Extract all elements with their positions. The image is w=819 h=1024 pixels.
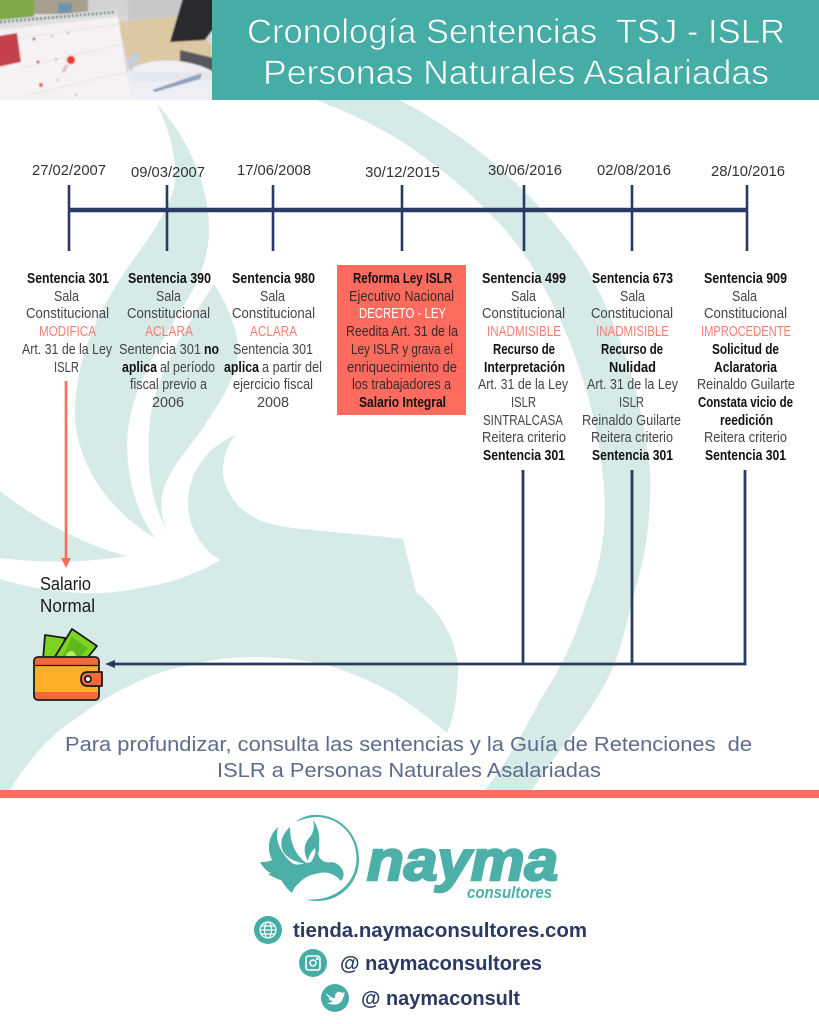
- arrow: later rulings back to wallet: [105, 470, 746, 668]
- column: Sentencia 980: a partir del: [262, 360, 322, 376]
- column: Sentencia 301: MODIFICA: [39, 324, 96, 340]
- column: Sentencia 673: INADMISIBLE: [596, 324, 669, 340]
- column: Sentencia 980: [224, 271, 322, 411]
- timeline axis: [69, 185, 747, 251]
- column: Sentencia 909: Constata vicio de: [698, 395, 793, 411]
- icon: globe: [254, 916, 282, 944]
- text: call to action: Para profundizar, consulta las sentencias y la Guía de Retenciones de: [65, 734, 752, 756]
- column: Sentencia 499: Sentencia 499: [482, 271, 566, 287]
- column: Sentencia 499: Constitucional: [482, 306, 565, 322]
- title: Personas Naturales Asalariadas: [263, 54, 769, 92]
- panel: Reforma Ley ISLR: DECRETO - LEY: [359, 306, 446, 322]
- column: Sentencia 390: Constitucional: [127, 306, 210, 322]
- timeline dates: 30/12/2015: [365, 165, 440, 181]
- text: call to action: [65, 734, 752, 782]
- column: Sentencia 673: [582, 271, 681, 464]
- timeline dates: [32, 163, 785, 181]
- column: Sentencia 301: Sentencia 301: [27, 271, 109, 287]
- column: Sentencia 390: no: [204, 342, 219, 358]
- timeline dates: 02/08/2016: [597, 163, 671, 179]
- column: Sentencia 980: Sentencia 980: [232, 271, 315, 287]
- label: Salario Normal: [40, 574, 95, 616]
- column: Sentencia 909: IMPROCEDENTE: [701, 324, 791, 340]
- label: Salario Normal: Normal: [40, 596, 95, 616]
- column: Sentencia 673: Sala: [620, 289, 646, 305]
- column: Sentencia 499: Interpretación: [484, 360, 565, 376]
- label: Salario Normal: Salario: [40, 574, 91, 594]
- background watermark: phoenix logo: [0, 100, 650, 790]
- column: Sentencia 980: ejercicio fiscal: [233, 377, 313, 393]
- column: Sentencia 390: [119, 271, 219, 411]
- panel: Reforma Ley ISLR: enriquecimiento de: [347, 360, 457, 376]
- icon: instagram: [299, 949, 327, 977]
- column: Sentencia 499: Sentencia 301: [483, 448, 565, 464]
- column: Sentencia 301: Sala: [54, 289, 80, 305]
- panel: Reforma Ley ISLR: Reedita Art. 31 de la: [346, 324, 459, 340]
- column: Sentencia 980: aplica: [224, 360, 260, 376]
- column: Sentencia 980: 2008: [257, 395, 289, 411]
- column: Sentencia 909: reedición: [720, 413, 773, 429]
- contact: website: tienda.naymaconsultores.com: [293, 919, 587, 942]
- contact: instagram: [299, 949, 542, 977]
- tagline: consultores: [467, 883, 552, 902]
- column: Sentencia 390: 2006: [152, 395, 184, 411]
- column: Sentencia 499: SINTRALCASA: [483, 413, 563, 429]
- panel: Reforma Ley ISLR: Ejecutivo Nacional: [349, 289, 454, 305]
- column: Sentencia 390: aplica: [122, 360, 158, 376]
- text: call to action: ISLR a Personas Naturales Asalariadas: [217, 760, 601, 782]
- wordmark: nayma: [367, 829, 558, 893]
- column: Sentencia 499: INADMISIBLE: [487, 324, 561, 340]
- contact: instagram: @ naymaconsultores: [340, 952, 542, 975]
- panel: Reforma Ley ISLR: Salario Integral: [359, 395, 446, 411]
- icon: wallet with banknotes: [34, 629, 102, 700]
- column: Sentencia 301: [22, 271, 113, 376]
- column: Sentencia 673: Nulidad: [609, 360, 656, 376]
- icon: twitter: [321, 984, 349, 1012]
- column: Sentencia 673: Sentencia 301: [592, 448, 673, 464]
- column: Sentencia 909: Sala: [732, 289, 758, 305]
- column: Sentencia 673: Constitucional: [591, 306, 673, 322]
- column: Sentencia 909: Constitucional: [704, 306, 787, 322]
- timeline dates: 09/03/2007: [131, 165, 205, 181]
- timeline dates: 30/06/2016: [488, 163, 562, 179]
- arrow: Sentencia 301 to Salario Normal: [61, 381, 71, 568]
- panel: Reforma Ley ISLR: Ley ISLR y grava el: [351, 342, 453, 358]
- column: Sentencia 909: Aclaratoria: [714, 360, 778, 376]
- title: Cronología Sentencias TSJ - ISLR: [247, 13, 785, 51]
- column: Sentencia 909: Reitera criterio: [704, 430, 787, 446]
- column: Sentencia 980: Sala: [260, 289, 286, 305]
- column: Sentencia 673: ISLR: [619, 395, 644, 411]
- column: Sentencia 390: ACLARA: [145, 324, 193, 340]
- column: Sentencia 909: Sentencia 909: [704, 271, 787, 287]
- column: Sentencia 499: Recurso de: [493, 342, 555, 358]
- column: Sentencia 499: ISLR: [511, 395, 536, 411]
- column: Sentencia 980: Constitucional: [232, 306, 315, 322]
- column: Sentencia 499: [478, 271, 569, 464]
- column: Sentencia 673: Reitera criterio: [591, 430, 673, 446]
- logo: nayma consultores: [260, 815, 558, 902]
- timeline dates: 28/10/2016: [711, 164, 785, 180]
- column: Sentencia 390: Sentencia 301: [119, 342, 201, 358]
- column: Sentencia 499: Art. 31 de la Ley: [478, 377, 569, 393]
- column: Sentencia 301: ISLR: [54, 360, 79, 376]
- column: Sentencia 673: Art. 31 de la Ley: [587, 377, 679, 393]
- header banner: [212, 0, 819, 100]
- panel: Reforma Ley ISLR: Reforma Ley ISLR: [353, 271, 452, 287]
- contact: twitter: [321, 984, 520, 1012]
- panel: Reforma Ley ISLR: los trabajadores a: [352, 377, 452, 393]
- column: Sentencia 673: Reinaldo Guilarte: [582, 413, 681, 429]
- column: Sentencia 673: Recurso de: [601, 342, 663, 358]
- panel: Reforma Ley ISLR: [337, 265, 466, 415]
- logo mark: phoenix in ring: [260, 815, 359, 901]
- timeline dates: 17/06/2008: [237, 163, 311, 179]
- column: Sentencia 390: Sentencia 390: [128, 271, 211, 287]
- column: Sentencia 499: Reitera criterio: [482, 430, 566, 446]
- column: Sentencia 980: ACLARA: [250, 324, 297, 340]
- column: Sentencia 909: [697, 271, 795, 464]
- timeline dates: 27/02/2007: [32, 163, 106, 179]
- column: Sentencia 301: Art. 31 de la Ley: [22, 342, 113, 358]
- column: Sentencia 390: Sala: [156, 289, 182, 305]
- column: Sentencia 301: Constitucional: [26, 306, 109, 322]
- column: Sentencia 909: Solicitud de: [712, 342, 779, 358]
- column: Sentencia 390: al período: [160, 360, 215, 376]
- header photo: desk calendar: [0, 0, 214, 102]
- column: Sentencia 499: Sala: [511, 289, 537, 305]
- column: Sentencia 980: Sentencia 301: [233, 342, 313, 358]
- column: Sentencia 909: Reinaldo Guilarte: [697, 377, 795, 393]
- column: Sentencia 390: fiscal previo a: [130, 377, 208, 393]
- title: [247, 13, 785, 92]
- divider bar: [0, 790, 819, 798]
- contact: twitter: @ naymaconsult: [361, 987, 520, 1010]
- column: Sentencia 909: Sentencia 301: [705, 448, 786, 464]
- column: Sentencia 673: Sentencia 673: [592, 271, 673, 287]
